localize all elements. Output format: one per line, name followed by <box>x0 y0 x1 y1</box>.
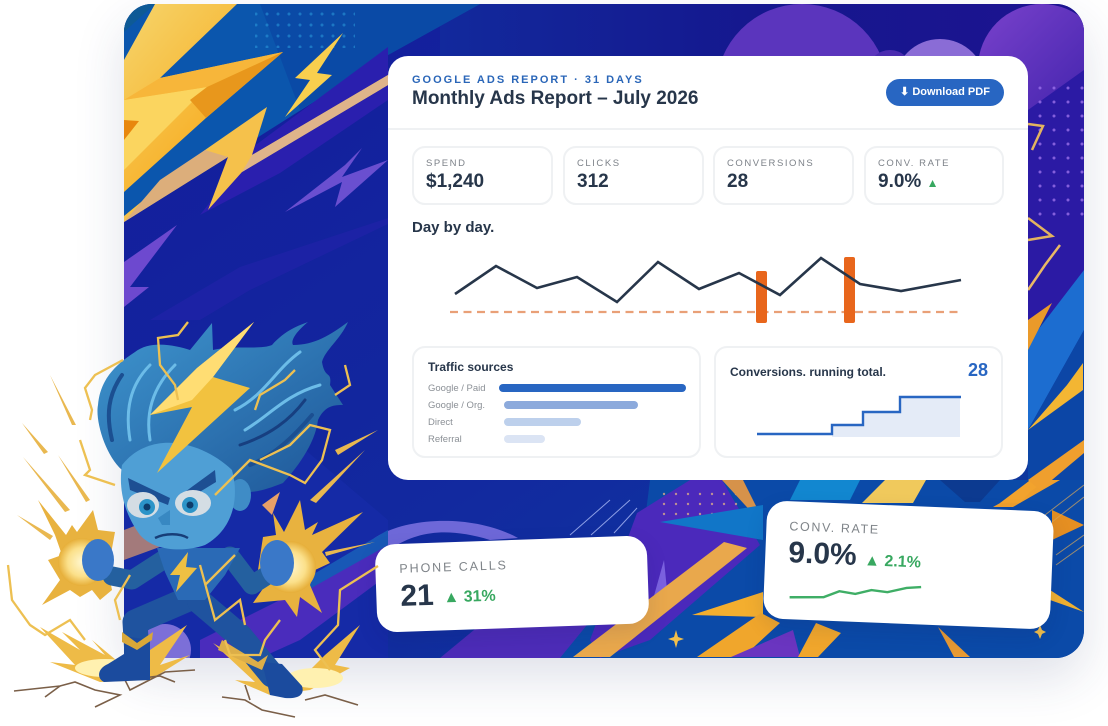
change indicator: ▲ 31% <box>443 588 496 606</box>
main report card <box>388 56 1028 480</box>
KPI: conversion rate: 9.0% ▲ <box>878 171 938 192</box>
top-right purple field <box>440 4 1106 330</box>
hair <box>97 322 348 492</box>
KPI: spend: SPEND <box>426 158 466 169</box>
panel heading: Conversions. running total. <box>730 365 886 379</box>
KPI: conversion rate: CONV. RATE <box>878 158 950 169</box>
KPI: conversions: CONVERSIONS <box>727 158 814 169</box>
faint purple bolts <box>124 148 388 320</box>
ground bursts <box>40 625 360 695</box>
panel: conversions running total <box>714 346 1003 458</box>
KPI: conversions: 28 <box>727 171 748 192</box>
character: lightning hero <box>6 321 378 718</box>
KPI: spend: $1,240 <box>426 171 484 192</box>
floating card: phone calls <box>375 535 649 633</box>
card label: CONV. RATE <box>789 519 879 537</box>
chart heading: Day by day. <box>412 219 494 236</box>
small yellow bolt <box>285 33 343 117</box>
top-left blue wedge <box>124 4 480 222</box>
bar row: Referral: Referral <box>428 434 462 445</box>
line chart: day by day <box>450 256 962 323</box>
torso and arms <box>112 548 266 600</box>
lightning strands <box>8 322 378 670</box>
background artwork panel <box>124 4 1084 658</box>
download button <box>886 79 1004 106</box>
eyebrow label: GOOGLE ADS REPORT · 31 DAYS <box>412 74 644 86</box>
bottom right shards <box>560 480 1084 658</box>
KPI: spend <box>412 146 553 205</box>
card value: 21 <box>400 579 434 613</box>
right side streaks <box>1028 245 1084 490</box>
bar row: Direct: Direct <box>428 417 453 428</box>
KPI: conversions <box>713 146 854 205</box>
KPI: conversion rate <box>864 146 1004 205</box>
panel shadow <box>124 4 1084 658</box>
total value: 28 <box>968 360 988 380</box>
KPI: clicks: CLICKS <box>577 158 621 169</box>
KPI: clicks <box>563 146 704 205</box>
KPI: clicks: 312 <box>577 171 609 192</box>
flying sparks <box>17 375 378 556</box>
lower left arcs and purple blocks <box>124 492 638 658</box>
boots <box>99 632 303 698</box>
fists <box>82 539 294 586</box>
card value: 9.0% <box>787 536 857 572</box>
change indicator: ▲ 2.1% <box>863 552 921 571</box>
bar row: Google / Org.: Google / Org. <box>428 400 485 411</box>
face <box>121 443 251 549</box>
big yellow bolt <box>124 4 283 192</box>
floating card: conversion rate <box>762 500 1054 630</box>
legs <box>135 600 272 675</box>
gold lightning on head <box>150 322 254 473</box>
hand bursts <box>38 500 363 617</box>
panel heading: Traffic sources <box>428 360 513 374</box>
ground cracks <box>14 670 358 717</box>
hair strands <box>109 352 320 465</box>
panel: traffic sources <box>412 346 701 458</box>
card label: PHONE CALLS <box>399 558 508 576</box>
download button: ⬇ Download PDF <box>900 86 990 98</box>
second gold bolt and streak <box>124 75 388 222</box>
bar row: Google / Paid: Google / Paid <box>428 383 486 394</box>
sparkline <box>790 586 922 598</box>
report title: Monthly Ads Report – July 2026 <box>412 88 698 109</box>
step chart <box>757 396 961 437</box>
